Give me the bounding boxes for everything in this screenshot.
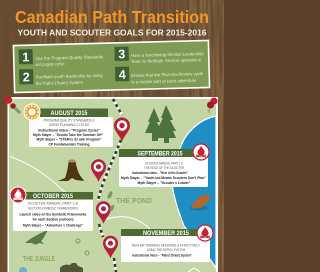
panel: november 2015: Instructional Video – "Patrol (Team) System" [132,254,192,258]
panel: september 2015: THE ROLE OF THE SCOUTER [144,166,184,170]
panel: august 2015: Myth Slayer – "STEM Is its own Program" [36,138,102,142]
panel: goals [13,40,210,93]
goal 4: Ensure that the Plan-Do-Review cycle [131,71,204,78]
icon: push pin left [5,96,20,113]
goal 2: the Patrol (Team) System [36,80,83,86]
panel: august 2015: AUGUST 2015 [50,111,88,117]
panel: august 2015 [24,104,113,147]
panel: august 2015: Instructional Video – "Program Cycles" [38,128,100,132]
panel: august 2015: USING PLANNING CYCLES [49,123,90,127]
icon: otter [190,195,210,210]
panel: november 2015: NEW MR TRAINING SESSIONS & EFFECTIVELY [132,244,201,248]
icon: campfire badge october [10,187,26,203]
icon: map pin 3 [96,201,111,224]
panel: november 2015 [121,225,213,262]
icon: beaver lodge stump [58,159,84,181]
title: Canadian Path Transition [15,7,209,27]
panel: october 2015: Myth Slayer – "Adventure v Challenge" [23,224,83,228]
panel: august 2015: Myth Slayer – "Scouts Take the Summer Off" [33,133,103,137]
goal 2: Facilitate youth leadership by using [36,73,103,79]
panel: october 2015: OCTOBER 2015 [33,194,74,200]
panel: september 2015: Instructional video – "Role of the Scouter" [132,171,188,175]
goal 4: is a routine part of each adventure [131,78,197,84]
icon: campfire badge [193,144,209,160]
panel: november 2015: USING THE PATROL SYSTEM [147,248,185,252]
icon: sun badge [24,104,40,120]
icon: map pin 1 [114,118,130,142]
wood background [0,0,224,272]
panel: september 2015: SCOUTER MANUAL PART 1 & [145,162,184,166]
goal 2: 2 [23,70,30,84]
goal 3 [115,45,204,64]
icon: map pin 4 [103,236,118,258]
icon: leaves [106,191,115,212]
panel: october 2015 [10,187,93,231]
trails [9,156,200,272]
panel: october 2015: for each Section (cartoon) [32,218,74,222]
panel: august 2015: CP Fundamentals Training [48,142,90,146]
panel: october 2015: SCOUTER MANUAL PART 2 & [28,202,79,206]
panel: september 2015 [119,144,209,187]
icon: pine trees [145,105,176,143]
panel: august 2015: PROGRAM QUALITY STANDARDS & [44,118,95,122]
goal 1 [19,47,104,67]
goal 4: 4 [119,68,126,82]
panel: november 2015: NOVEMBER 2015 [143,231,190,237]
icon: blue circle [19,267,27,272]
goal 3: Team to facilitate Section operations [131,57,202,64]
goal 2 [19,67,104,86]
icon: paw prints [76,239,89,255]
goal 4 [115,65,204,85]
label: the pond: THE POND [116,196,153,205]
goal 1: and program cycles [35,61,65,67]
label: the jungle: THE JUNGLE [23,254,55,263]
water: lake [172,116,216,268]
panel: october 2015: Launch video on the Symbolic Frameworks [20,212,86,216]
icon: eagle [25,230,48,244]
goal 3: Have a functioning Section Leadership [131,51,204,58]
panel: map [5,96,218,272]
icon: campfire badge november [197,225,213,241]
icon: push pin right [207,98,218,113]
goal 1: Use the Program Quality Standards [35,54,104,61]
goal 3: 3 [118,47,125,61]
panel: september 2015: Myth Slayer – "Scouter v Leader" [138,181,191,185]
icon: monkey [60,263,83,272]
panel: september 2015: SEPTEMBER 2015 [138,152,183,158]
panel: october 2015: SECTION SYMBOLIC FRAMEWORKS [28,206,79,210]
goal 1: 1 [22,50,29,64]
dashed route [98,99,122,272]
icon: map pin 2 [91,159,106,182]
subtitle: YOUTH AND SCOUTER GOALS FOR 2015-2016 [18,28,207,38]
panel: september 2015: Myth Slayer – "Youth-led Means Scouters Don't Plan" [121,176,206,180]
